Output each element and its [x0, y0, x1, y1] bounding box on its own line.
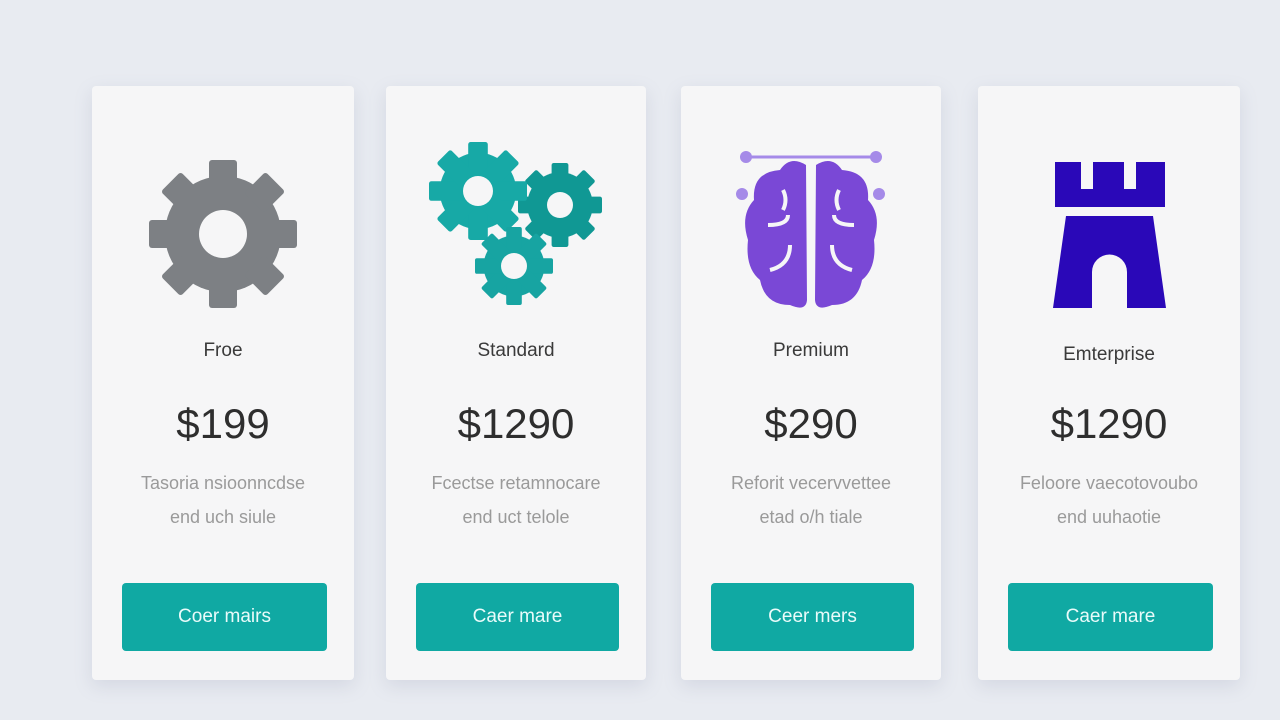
heading: Emterprise: [1063, 344, 1155, 365]
button: Caer mare: [1066, 606, 1155, 627]
panel: Standard: [386, 86, 646, 680]
icon: castle: [1053, 162, 1166, 308]
button: [711, 583, 914, 651]
description: Reforit vecervvettee: [731, 473, 891, 493]
description: [141, 473, 305, 527]
panel: Enterprise: [978, 86, 1240, 680]
description: end uuhaotie: [1057, 507, 1161, 527]
panel: Free: [92, 86, 354, 680]
price: $290: [764, 400, 858, 447]
description: end uct telole: [462, 507, 570, 527]
price: $1290: [458, 400, 574, 447]
button: [122, 583, 327, 651]
description: Fcectse retamnocare: [431, 473, 601, 493]
description: Feloore vaecotovoubo: [1020, 473, 1198, 493]
description: end uch siule: [170, 507, 276, 527]
panel: Premium: [681, 86, 941, 680]
description: Tasoria nsioonncdse: [141, 473, 305, 493]
icon: brain: [736, 151, 885, 308]
button: [416, 583, 619, 651]
button: [1008, 583, 1213, 651]
description: [1020, 473, 1198, 527]
icon: gears: [428, 142, 602, 305]
description: etad o/h tiale: [759, 507, 863, 527]
price: $1290: [1051, 400, 1167, 447]
description: [731, 473, 891, 527]
button: Ceer mers: [768, 606, 857, 627]
button: Coer mairs: [178, 606, 271, 627]
price: $199: [176, 400, 270, 447]
button: Caer mare: [473, 606, 562, 627]
heading: Standard: [477, 340, 555, 361]
heading: Froe: [203, 340, 243, 361]
description: [431, 473, 601, 527]
heading: Premium: [773, 340, 849, 361]
icon: gear: [149, 160, 297, 308]
